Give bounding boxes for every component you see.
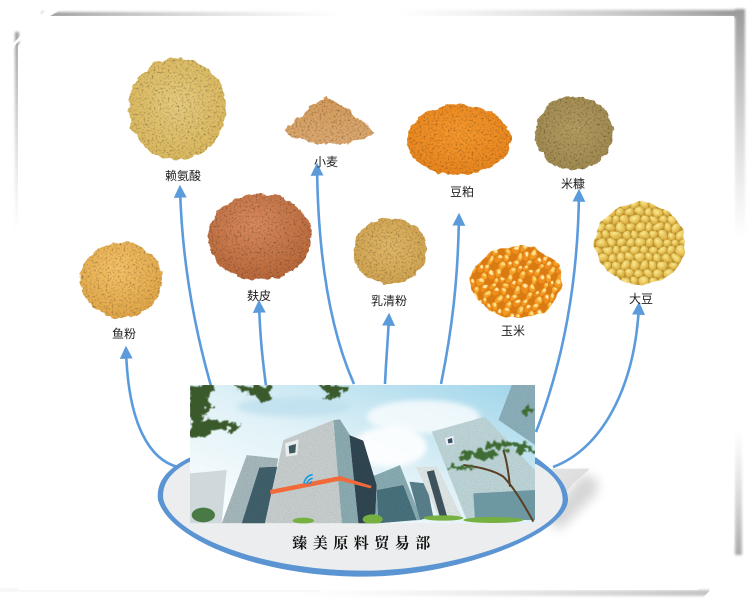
arrow: 麸皮 <box>259 303 266 386</box>
top-right tower <box>498 385 535 445</box>
arrow: 小麦 <box>317 166 354 384</box>
powder: 小麦 <box>284 98 375 144</box>
label: 小麦: 小麦 <box>314 155 338 169</box>
label: 鱼粉: 鱼粉 <box>112 327 136 341</box>
powder: 乳清粉 <box>353 218 427 284</box>
ellipse disc <box>158 457 568 577</box>
fold shadow <box>533 469 598 530</box>
label: 豆粕: 豆粕 <box>450 184 474 199</box>
powder: 豆粕 <box>407 105 511 175</box>
top-left fold gap <box>0 0 62 72</box>
powder: 玉米 <box>471 246 563 318</box>
window <box>285 439 299 457</box>
label: 米糠: 米糠 <box>561 176 585 191</box>
arrow: 米糠 <box>536 192 579 432</box>
label: 麸皮: 麸皮 <box>247 289 271 303</box>
main tower glass <box>333 419 377 523</box>
tilted right building <box>432 417 535 520</box>
title: 臻美原料贸易部: 臻美原料贸易部 <box>292 534 436 552</box>
base platform <box>158 385 598 577</box>
bottom-right fold gap <box>696 546 752 605</box>
main tower left face <box>265 420 342 523</box>
label: 玉米: 玉米 <box>501 324 525 338</box>
label: 赖氨酸: 赖氨酸 <box>165 168 201 183</box>
powder: 米糠 <box>535 96 613 170</box>
orange band <box>270 476 372 494</box>
arrow: 鱼粉 <box>126 349 178 467</box>
arrow: 乳清粉 <box>385 316 389 384</box>
wifi icon <box>304 475 313 484</box>
back mid buildings <box>372 465 422 523</box>
shrubs <box>192 508 523 524</box>
arrow: 豆粕 <box>441 216 459 384</box>
left building <box>222 455 278 523</box>
arrow: 赖氨酸 <box>180 188 211 386</box>
powder: 麸皮 <box>208 194 312 280</box>
label: 乳清粉: 乳清粉 <box>371 294 407 308</box>
left trees <box>190 385 350 438</box>
powder: 鱼粉 <box>80 242 162 318</box>
building photo <box>190 385 535 524</box>
arrow: 大豆 <box>553 305 639 467</box>
powder: 赖氨酸 <box>128 58 226 160</box>
powder: 大豆 <box>595 202 685 284</box>
label: 大豆: 大豆 <box>629 292 653 306</box>
right tree <box>443 407 535 522</box>
